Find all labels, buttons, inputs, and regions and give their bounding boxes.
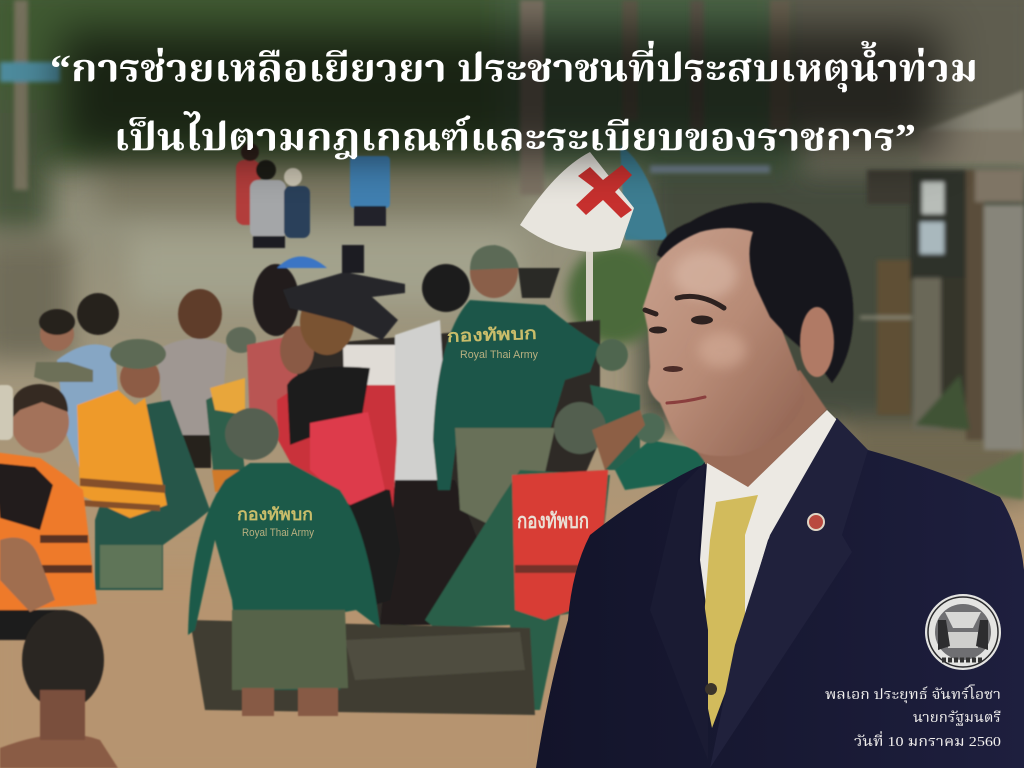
signature text [825,684,1001,750]
umbrella and bushes [620,145,668,240]
grey shirt woman [157,339,227,437]
red cross flag [520,152,634,335]
tree trunks and posts at top [0,0,1024,195]
shirt [700,410,837,650]
title [50,40,978,159]
soldier shirt lettering: กองทัพบก [446,324,537,346]
white shirt man [343,345,430,600]
tie clip [705,683,717,695]
soldiers on right [590,385,640,470]
eyebrows [645,296,724,314]
portrait: prime minister [536,203,1024,768]
nostril [663,366,683,372]
signature text: วันที่ 10 มกราคม 2560 [854,731,1001,750]
left man in orange vest [0,452,97,625]
tie [700,495,758,728]
eyes [649,326,667,334]
face highlights [673,251,737,299]
boat [190,620,535,715]
woman with red backpack [277,385,397,580]
lapel pin [808,514,824,530]
big soldier foreground [188,463,380,690]
right lapel [710,418,868,768]
video camera [283,272,405,340]
small vest soldier [206,385,247,490]
mouth [667,397,705,403]
signature text: นายกรัฐมนตรี [913,710,1001,726]
ear [800,307,834,377]
green soldier centre back [433,300,600,490]
neck [680,370,827,490]
face [643,228,805,456]
left lapel [650,462,708,760]
soldier shirt lettering: Royal Thai Army [242,527,314,539]
house, door and wall on the right [860,170,1024,500]
soldier shirt lettering: Royal Thai Army [460,349,538,361]
distant people [236,143,390,248]
soldier shirt lettering [237,324,589,539]
icon: government seal [925,594,1001,670]
soldier shirt lettering: กองทัพบก [517,510,589,533]
title: เป็นไปตามกฎเกณฑ์และระเบียบของราชการ” [114,112,916,159]
rescuers crowd [0,245,706,768]
hair [657,203,853,383]
soldier shirt lettering: กองทัพบก [237,505,313,524]
suit jacket [536,418,1024,768]
red shirt man [247,335,300,430]
dark mass [247,320,600,625]
dark haze behind title [60,30,940,155]
soldier with red vest [425,470,610,710]
foreground person head [22,610,104,710]
title: “การช่วยเหลือเยียวยา ประชาชนที่ประสบเหตุน้ำท่วม [50,40,978,93]
orange vest man [95,400,210,590]
blue shirt man carrying child [57,344,120,470]
signature text: พลเอก ประยุทธ์ จันทร์โอชา [825,684,1001,703]
